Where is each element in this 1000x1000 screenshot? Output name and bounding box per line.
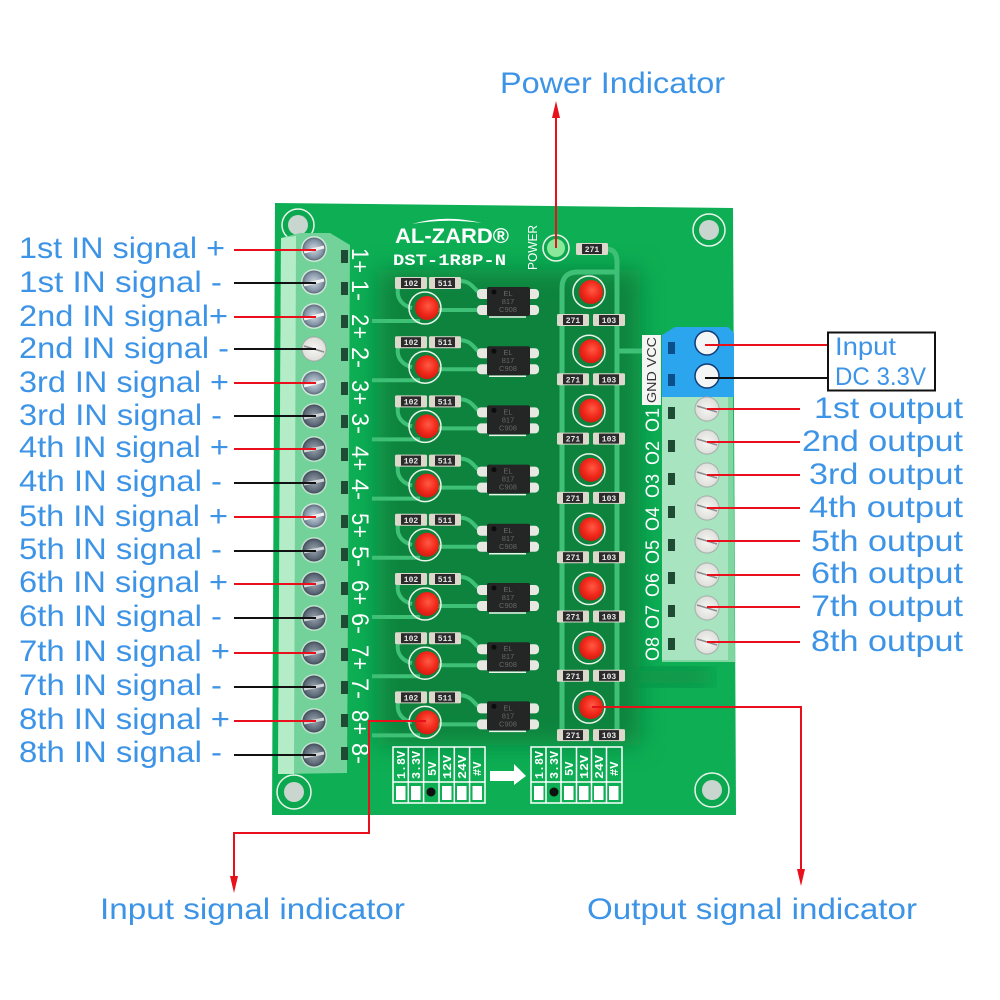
output terminal silk labels: O3 — [643, 474, 664, 498]
output labels — [802, 392, 964, 658]
output LED 5: 271 — [566, 554, 580, 563]
output LED 8: 103 — [602, 732, 616, 741]
output LED 3: 271 — [566, 436, 580, 445]
channel 6 — [372, 573, 539, 620]
output terminal silk labels: O4 — [643, 507, 664, 531]
channel 8: 511 — [438, 694, 452, 703]
input terminal silk labels: 1- — [346, 280, 373, 301]
output terminal silk labels: O1 — [643, 408, 664, 432]
channel 4: 511 — [438, 458, 452, 467]
input terminal silk labels: 7+ — [346, 645, 373, 670]
input terminal silk labels: 8+ — [346, 710, 373, 735]
input wires — [234, 250, 316, 755]
panel: circuit board — [272, 203, 736, 815]
output LED 4: 103 — [602, 495, 616, 504]
input labels: 1st IN signal - — [19, 266, 222, 299]
output labels: 8th output — [811, 625, 964, 658]
input labels: 4th IN signal - — [19, 465, 222, 498]
input labels: 7th IN signal - — [19, 669, 222, 702]
jumper table: input: 12V — [441, 754, 455, 779]
callout: output signal indicator — [587, 707, 917, 926]
channel 5: 102 — [404, 517, 418, 526]
output LED 5: 103 — [602, 554, 616, 563]
input labels: 2nd IN signal+ — [19, 300, 228, 333]
callout: output signal indicator: Output signal indicator — [587, 893, 917, 926]
output LED 2: 103 — [602, 376, 616, 385]
channel 4: 102 — [404, 458, 418, 467]
output LED 6: 271 — [566, 614, 580, 622]
jumper table: output — [531, 747, 622, 803]
channel 1: 102 — [404, 280, 418, 289]
GND VCC label: GND VCC — [644, 337, 659, 403]
input terminal silk labels: 4+ — [346, 446, 373, 471]
channel 5: EL — [503, 526, 513, 535]
output labels: 5th output — [811, 525, 964, 558]
channel 2 — [372, 336, 539, 383]
input terminal silk labels: 7- — [346, 678, 373, 699]
input terminal silk labels: 6- — [346, 613, 373, 634]
channel 5: C908 — [499, 542, 517, 551]
channel 4: EL — [503, 467, 513, 476]
input terminal block — [278, 233, 350, 774]
jumper table: output: 12V — [578, 754, 592, 779]
input labels: 3rd IN signal - — [19, 399, 222, 432]
output LED 1: 103 — [602, 317, 616, 326]
power LED — [543, 235, 569, 261]
channel 5 — [372, 514, 539, 561]
jumper table: output: 3.3V — [548, 750, 562, 779]
input terminal silk labels: 6+ — [346, 580, 373, 605]
logo: DST-1R8P-N — [393, 252, 506, 270]
input labels: 7th IN signal + — [19, 635, 230, 668]
input terminal silk labels: 8- — [346, 743, 373, 764]
callout: power indicator: Power Indicator — [500, 67, 725, 100]
jumper table: input: #V — [471, 761, 485, 776]
input labels: 8th IN signal + — [19, 703, 230, 736]
output LED 7: 271 — [566, 673, 580, 682]
input labels: 5th IN signal - — [19, 533, 222, 566]
jumper table: input — [393, 747, 485, 803]
input labels: 1st IN signal + — [19, 232, 225, 265]
jumper table: output: 1.8V — [533, 750, 547, 779]
output labels: 6th output — [811, 557, 964, 590]
channel 2: 511 — [438, 339, 452, 348]
mounting holes — [277, 209, 729, 809]
channel 7: C908 — [499, 660, 517, 669]
output LED 3: 103 — [602, 436, 616, 445]
channel 5: 817 — [502, 534, 514, 543]
output LED 5 — [557, 513, 625, 563]
input terminal silk labels: 3- — [346, 413, 373, 434]
input labels: 8th IN signal - — [19, 736, 222, 769]
output LED 2: 271 — [566, 376, 580, 385]
channel 7: EL — [503, 644, 513, 653]
channel 7: 102 — [404, 635, 418, 644]
input labels: 4th IN signal + — [19, 431, 229, 464]
power resistor: 271 — [585, 246, 599, 255]
output LED 7: 103 — [602, 673, 616, 682]
jumper table: input: 5V — [426, 761, 440, 776]
channel 8: EL — [503, 703, 513, 712]
input terminal silk labels — [346, 248, 373, 764]
channel 4: 817 — [502, 475, 514, 484]
channel 1: 511 — [438, 280, 452, 289]
input labels — [19, 232, 230, 769]
output LED 1: 271 — [566, 317, 580, 326]
output LED 1 — [557, 276, 625, 326]
input labels: 2nd IN signal - — [19, 332, 229, 365]
output labels: 1st output — [814, 392, 964, 425]
power label: POWER — [525, 225, 540, 270]
output terminal silk labels: O7 — [643, 605, 664, 629]
channel 3: EL — [503, 407, 513, 416]
input terminal silk labels: 4- — [346, 479, 373, 500]
input labels: 6th IN signal - — [19, 600, 222, 633]
output terminal block — [662, 327, 735, 662]
output labels: 3rd output — [809, 458, 964, 491]
channel 1: EL — [503, 289, 513, 298]
input labels: 5th IN signal + — [19, 500, 228, 533]
input labels: 3rd IN signal + — [19, 366, 229, 399]
output LED 8: 271 — [566, 732, 580, 741]
channel 2: C908 — [499, 364, 517, 373]
traces: output column — [562, 249, 642, 730]
channel 7: 511 — [438, 635, 452, 644]
channel 8 — [372, 691, 539, 738]
logo: AL-ZARD® — [395, 225, 510, 248]
power resistor — [576, 243, 608, 255]
output LED 2 — [557, 335, 625, 385]
callout: input DC 3.3V: Input — [835, 333, 896, 361]
channel 7: 817 — [502, 652, 514, 661]
output labels: 2nd output — [802, 425, 964, 458]
channel 3: 102 — [404, 398, 418, 407]
channel 4 — [372, 455, 539, 502]
channel 4: C908 — [499, 483, 517, 492]
output LED 4 — [557, 454, 625, 504]
logo — [393, 219, 510, 270]
output LED 4: 271 — [566, 495, 580, 504]
jumper table: input: 1.8V — [395, 750, 409, 779]
channel 6: C908 — [499, 601, 517, 610]
output terminal silk labels: O2 — [643, 441, 664, 465]
input terminal silk labels: 3+ — [346, 380, 373, 405]
output LED 6 — [557, 572, 625, 622]
channel 6: 102 — [404, 576, 418, 585]
channel 2: EL — [503, 348, 513, 357]
jumper table: output: 5V — [563, 761, 577, 776]
output terminal silk labels: O6 — [643, 573, 664, 597]
callout: input DC 3.3V — [705, 332, 935, 391]
channel 6: EL — [503, 585, 513, 594]
channel 8: C908 — [499, 719, 517, 728]
channel 1: 817 — [502, 297, 514, 306]
jumper table: input: 3.3V — [410, 750, 424, 779]
callout: power indicator — [500, 67, 725, 248]
output LED 3 — [557, 395, 625, 445]
channel 1: C908 — [499, 305, 517, 314]
callout: input DC 3.3V: DC 3.3V — [835, 363, 926, 391]
jumper table: output: #V — [608, 761, 622, 776]
channel 5: 511 — [438, 517, 452, 526]
channel 6: 817 — [502, 593, 514, 602]
channel 7 — [372, 632, 539, 679]
output labels: 4th output — [809, 491, 964, 524]
output LED 6: 103 — [602, 614, 616, 622]
output terminal silk labels: O8 — [643, 637, 664, 661]
channel 6: 511 — [438, 576, 452, 585]
channel 3: 817 — [502, 415, 514, 424]
channel 8: 102 — [404, 694, 418, 703]
channel 8: 817 — [502, 711, 514, 720]
output LED 7 — [557, 632, 625, 682]
callout: input signal indicator — [100, 721, 426, 926]
channel 3 — [372, 395, 539, 442]
input terminal silk labels: 5- — [346, 546, 373, 567]
channel 3: 511 — [438, 398, 452, 407]
input terminal silk labels: 1+ — [346, 248, 373, 273]
output LED 8 — [557, 691, 625, 741]
input labels: 6th IN signal + — [19, 566, 228, 599]
jumper table: output: 24V — [593, 754, 607, 779]
input terminal silk labels: 5+ — [346, 513, 373, 538]
output terminal silk labels: O5 — [643, 540, 664, 564]
channel 1 — [372, 277, 539, 324]
GND VCC label — [642, 335, 661, 405]
output wires — [707, 409, 800, 642]
jumper table: input: 24V — [456, 754, 470, 779]
output labels: 7th output — [811, 590, 964, 623]
channel 2: 817 — [502, 356, 514, 365]
input terminal silk labels: 2+ — [346, 314, 373, 339]
arrow: jumper change — [490, 764, 526, 785]
callout: input signal indicator: Input signal indicator — [100, 893, 405, 926]
output terminal silk labels — [643, 408, 664, 661]
input terminal silk labels: 2- — [346, 347, 373, 368]
channel 3: C908 — [499, 423, 517, 432]
channel 2: 102 — [404, 339, 418, 348]
